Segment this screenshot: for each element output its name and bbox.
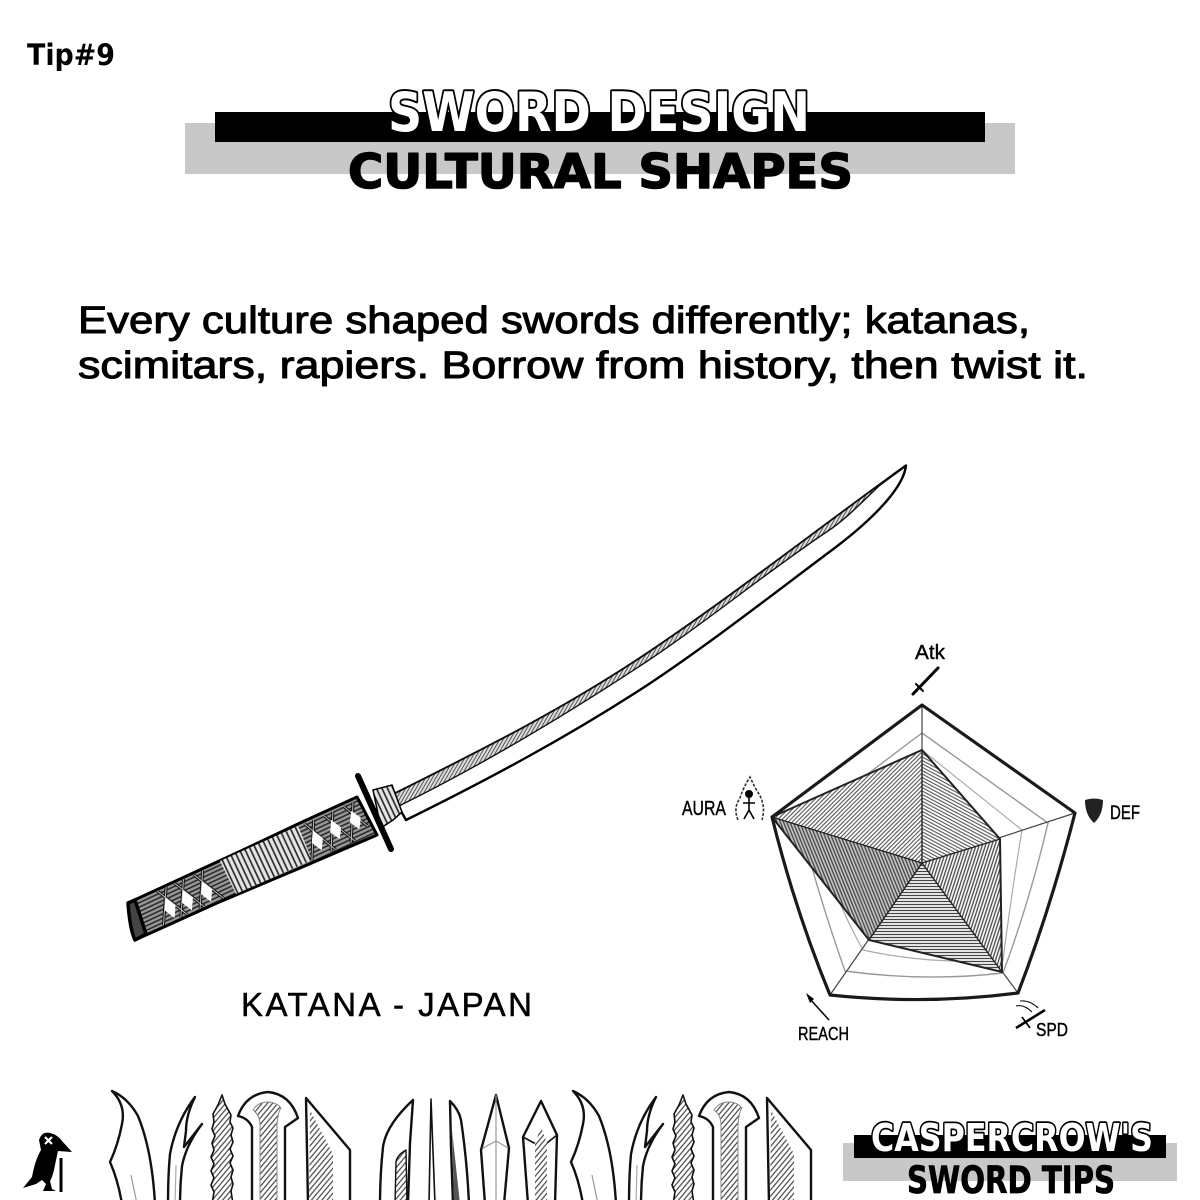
intro text	[78, 300, 1088, 387]
crow logo	[23, 1133, 72, 1192]
icon: reach arrow	[806, 993, 829, 1020]
wedge def-spd	[922, 839, 1002, 972]
axes	[772, 705, 1075, 995]
sword shape 10	[523, 1101, 557, 1200]
series badge	[843, 1116, 1177, 1200]
ring outer light	[800, 733, 1048, 977]
sword shapes row	[110, 1091, 811, 1200]
wedge spd-reach	[869, 863, 1002, 972]
sword shape 1	[110, 1091, 155, 1200]
first sword set	[110, 1091, 350, 1200]
tip number: Tip#9	[27, 38, 115, 72]
sword shape 4	[238, 1092, 298, 1200]
sword shape 6	[380, 1100, 413, 1200]
icon: speed sword	[1016, 1001, 1045, 1028]
sword caption: KATANA - JAPAN	[241, 986, 532, 1023]
wedge aura-atk	[772, 750, 922, 863]
handle middle band	[220, 826, 312, 894]
sword shape 3	[211, 1095, 233, 1200]
data outline	[772, 750, 1002, 972]
butt cap	[128, 900, 146, 940]
badge name: CASPERCROW'S	[871, 1116, 1153, 1160]
lattice cords	[149, 801, 371, 926]
banner black bar	[215, 112, 985, 142]
tsuba guard	[358, 776, 391, 849]
sword shape 2	[168, 1097, 202, 1200]
label reach: REACH	[798, 1024, 849, 1044]
label def: DEF	[1110, 803, 1140, 824]
diamonds	[158, 808, 367, 920]
sword shape 8	[450, 1101, 469, 1200]
heading: sword design: SWORD DESIGN	[388, 81, 810, 144]
banner grey bar	[185, 123, 1015, 174]
icon: aura figure	[736, 777, 763, 820]
label aura: AURA	[682, 798, 727, 820]
katana illustration	[128, 466, 906, 940]
badge grey bar	[843, 1143, 1177, 1181]
wedge reach-aura	[772, 817, 922, 940]
label atk: Atk	[915, 642, 946, 664]
lattice highlights	[149, 801, 371, 926]
icon: atk sword	[913, 668, 938, 694]
second sword set	[571, 1091, 811, 1200]
label spd: SPD	[1036, 1020, 1068, 1040]
handle wrap	[128, 797, 377, 940]
habaki collar	[373, 785, 402, 828]
icon: shield	[1085, 798, 1103, 823]
crow eye mark	[45, 1137, 52, 1144]
heading: cultural shapes: CULTURAL SHAPES	[348, 145, 853, 200]
sword shape 5	[306, 1098, 350, 1200]
radar chart	[682, 642, 1140, 1044]
crow body	[23, 1133, 72, 1191]
sword shape 7	[429, 1099, 435, 1200]
title banner	[185, 81, 1015, 200]
blade hatched band	[392, 475, 893, 806]
outer pentagon	[772, 705, 1075, 1000]
data inner axes	[772, 750, 1002, 972]
intro line 2: scimitars, rapiers. Borrow from history, then twist it.	[78, 345, 1088, 387]
sword shape 9	[481, 1095, 509, 1200]
badge black bar	[854, 1135, 1166, 1158]
wedge atk-def	[922, 750, 1000, 863]
blade	[392, 466, 906, 820]
intro line 1: Every culture shaped swords differently; katanas,	[78, 300, 1030, 342]
crow pencil	[60, 1158, 62, 1192]
ring inner light	[815, 750, 1022, 961]
handle lattice and diamonds	[149, 801, 371, 926]
